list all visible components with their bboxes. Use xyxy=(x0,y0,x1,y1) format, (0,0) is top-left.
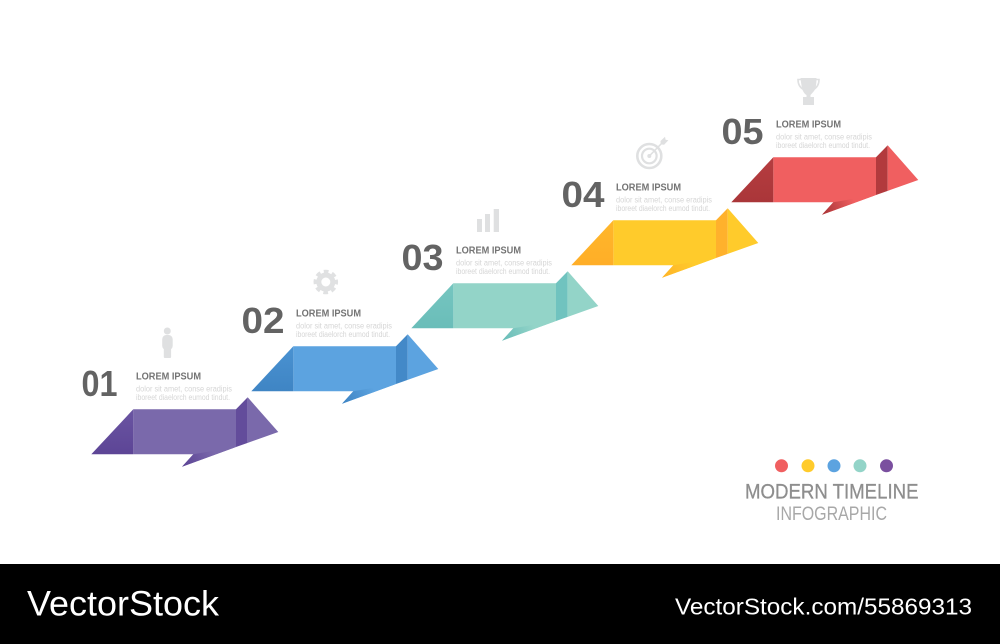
step 01 purple xyxy=(82,328,278,467)
description 04 xyxy=(616,196,712,213)
heading 05: LOREM IPSUM xyxy=(776,118,841,130)
footer logo: VectorStock xyxy=(27,585,220,624)
description 03: dolor sit amet, conse eradipis xyxy=(456,258,552,268)
arrow 04 xyxy=(571,208,758,278)
legend subtitle: INFOGRAPHIC xyxy=(776,503,887,525)
number 04: 04 xyxy=(562,174,604,215)
number 05: 05 xyxy=(722,111,764,152)
icon: target xyxy=(637,137,668,168)
description 02 xyxy=(296,322,392,339)
arrow 01 xyxy=(91,397,278,467)
arrow 02 xyxy=(251,334,438,404)
arrow 03 xyxy=(411,271,598,341)
description 05: iboreet diaelorch eumod tindut. xyxy=(776,141,870,150)
description 02: dolor sit amet, conse eradipis xyxy=(296,322,392,330)
icon: person xyxy=(162,328,173,358)
icon: bar chart xyxy=(477,209,499,232)
step 02 blue xyxy=(242,269,438,404)
number 01: 01 xyxy=(82,363,118,404)
description 04: dolor sit amet, conse eradipis xyxy=(616,196,712,204)
heading 02: LOREM IPSUM xyxy=(296,308,361,320)
description 05: dolor sit amet, conse eradipis xyxy=(776,132,872,142)
footer url: VectorStock.com/55869313 xyxy=(675,593,972,619)
arrow 05 xyxy=(731,145,918,215)
legend title: MODERN TIMELINE xyxy=(745,480,918,504)
heading 04: LOREM IPSUM xyxy=(616,182,681,194)
description 04: iboreet diaelorch eumod tindut. xyxy=(616,204,710,213)
icon: gear xyxy=(313,269,338,295)
description 02: iboreet diaelorch eumod tindut. xyxy=(296,330,390,339)
description 01: iboreet diaelorch eumod tindut. xyxy=(136,393,230,402)
step 03 teal xyxy=(402,209,598,341)
description 03: iboreet diaelorch eumod tindut. xyxy=(456,267,550,276)
heading 03: LOREM IPSUM xyxy=(456,244,521,256)
icon: trophy xyxy=(798,78,819,105)
legend xyxy=(745,459,918,525)
description 01: dolor sit amet, conse eradipis xyxy=(136,384,232,394)
number 02: 02 xyxy=(242,300,284,341)
heading 01: LOREM IPSUM xyxy=(136,370,201,382)
number 03: 03 xyxy=(402,237,444,278)
description 03 xyxy=(456,258,552,276)
step 04 yellow xyxy=(562,137,758,278)
description 05 xyxy=(776,132,872,150)
step 05 red xyxy=(722,78,918,215)
colour dots xyxy=(775,459,893,472)
footer bar xyxy=(0,564,1000,644)
description 01 xyxy=(136,384,232,402)
